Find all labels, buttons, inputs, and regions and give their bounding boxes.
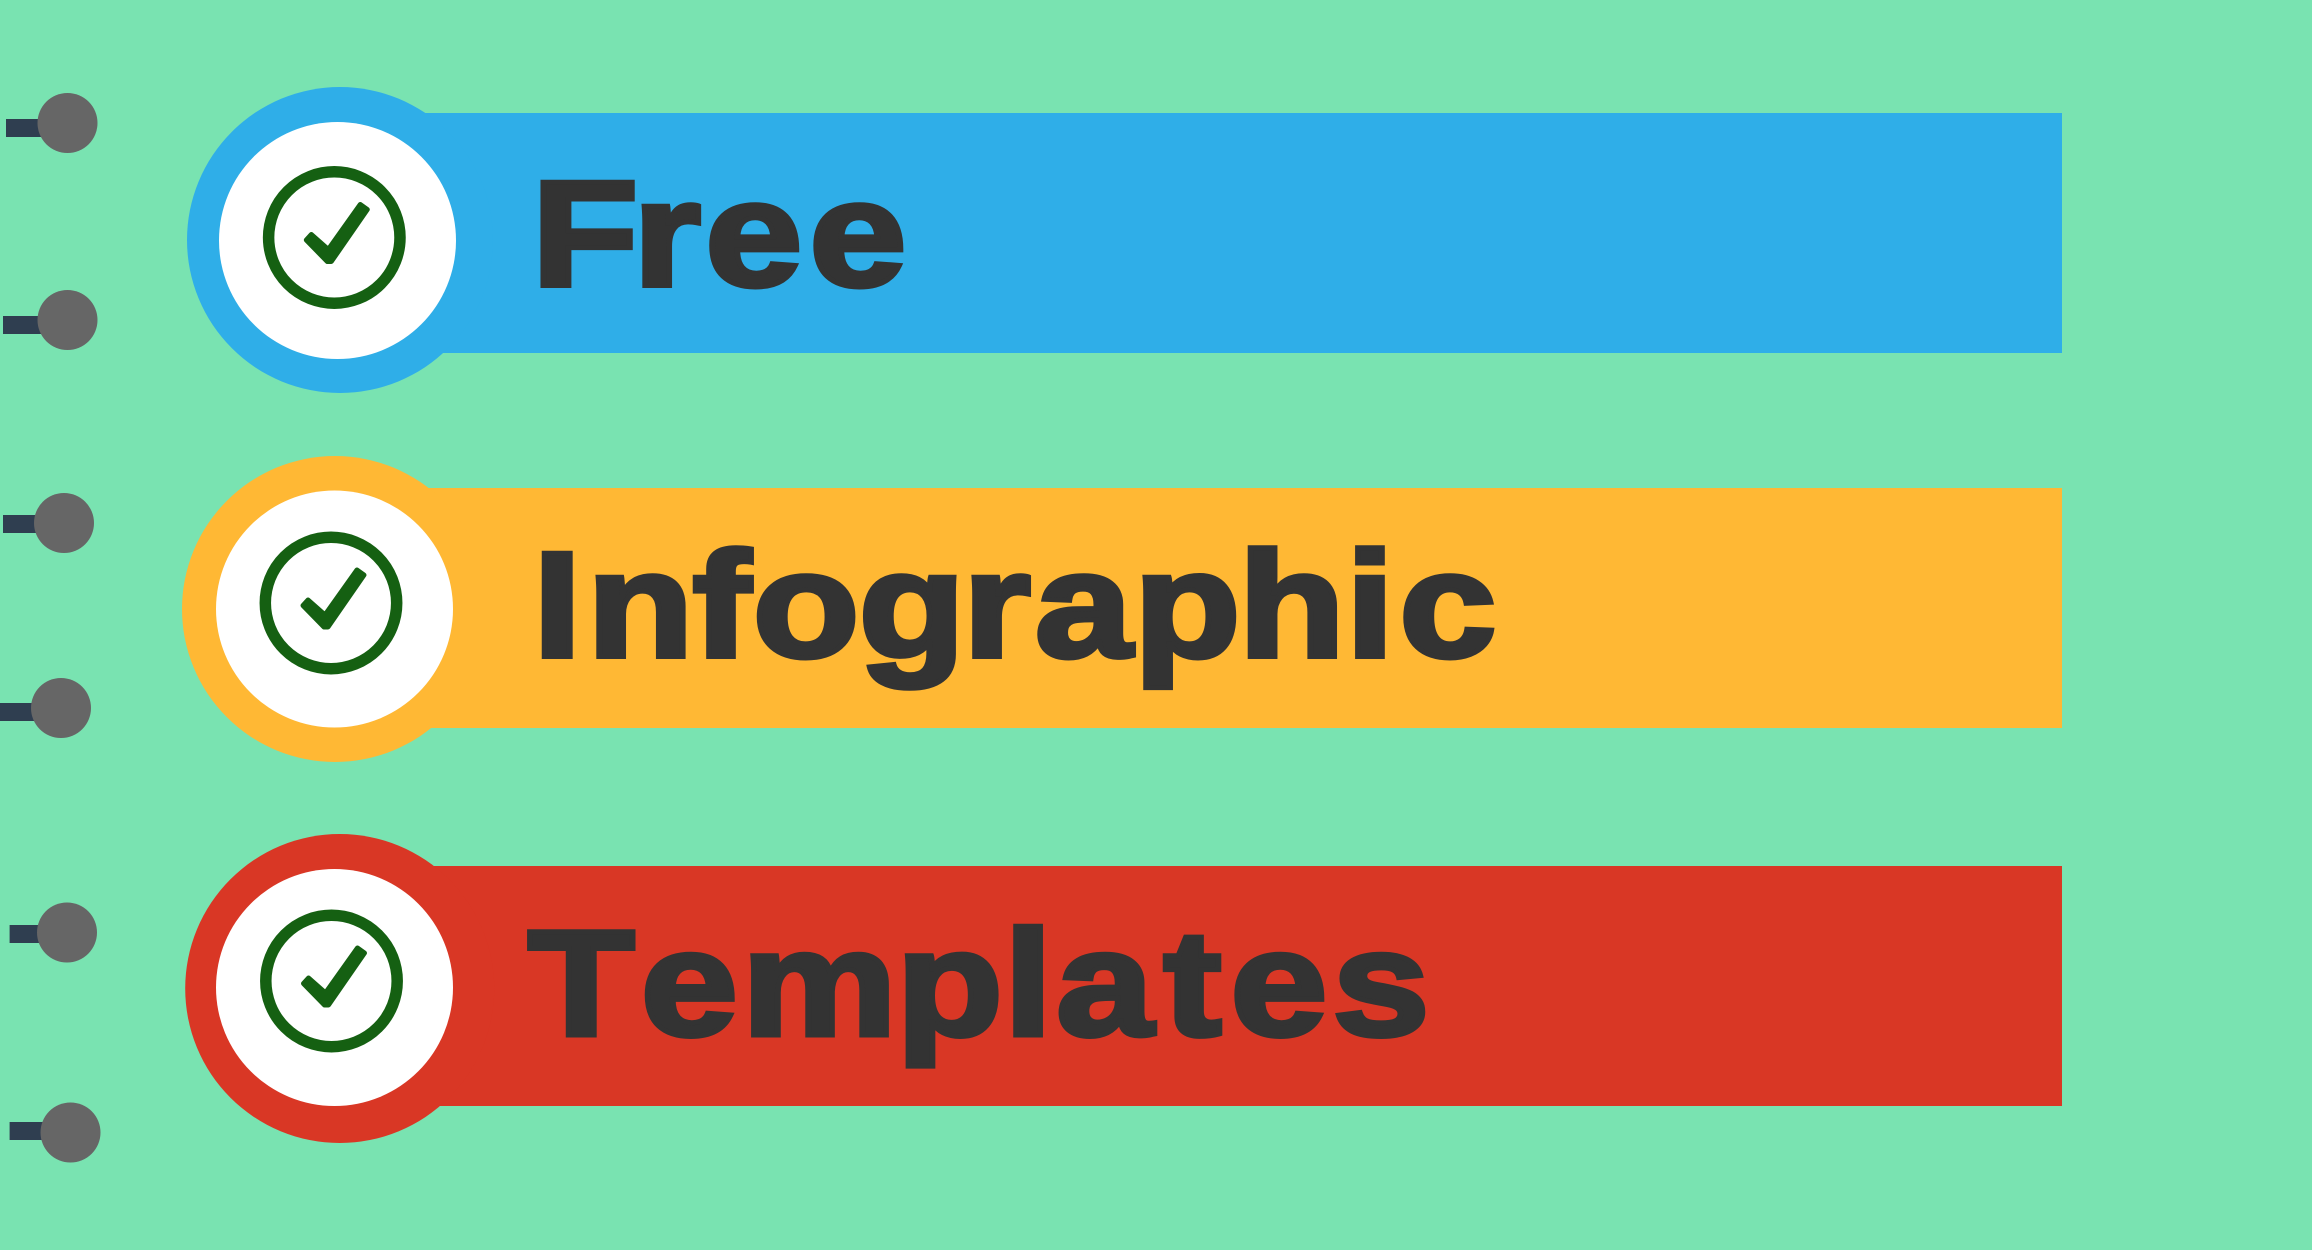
- bullet dot 1: [6, 93, 98, 153]
- red banner: [340, 866, 2062, 1106]
- panel: Templates: [185, 834, 2062, 1143]
- bullet dot 6: [10, 1102, 101, 1162]
- panel: Free: [187, 87, 2062, 393]
- white circle: [216, 869, 453, 1106]
- bullet dot 5: [10, 902, 97, 962]
- blue banner: [339, 113, 2062, 353]
- white circle: [219, 122, 456, 359]
- icon: check mark in ring: [266, 915, 397, 1047]
- bullet dot 4: [0, 678, 91, 738]
- icon: check mark in ring: [269, 172, 400, 303]
- bullet dot 3: [3, 493, 94, 553]
- panel: Infographic: [182, 456, 2062, 762]
- icon: check mark in ring: [265, 537, 397, 669]
- red circle: [185, 834, 494, 1143]
- heading: Infographic: Infographic: [533, 522, 1496, 689]
- blue circle: [187, 87, 493, 393]
- bullet dot 2: [3, 290, 98, 350]
- yellow banner: [335, 488, 2062, 728]
- white circle: [216, 490, 453, 728]
- heading: Templates: Templates: [528, 900, 1430, 1067]
- yellow circle: [182, 456, 488, 762]
- heading: Free: Free: [532, 151, 906, 318]
